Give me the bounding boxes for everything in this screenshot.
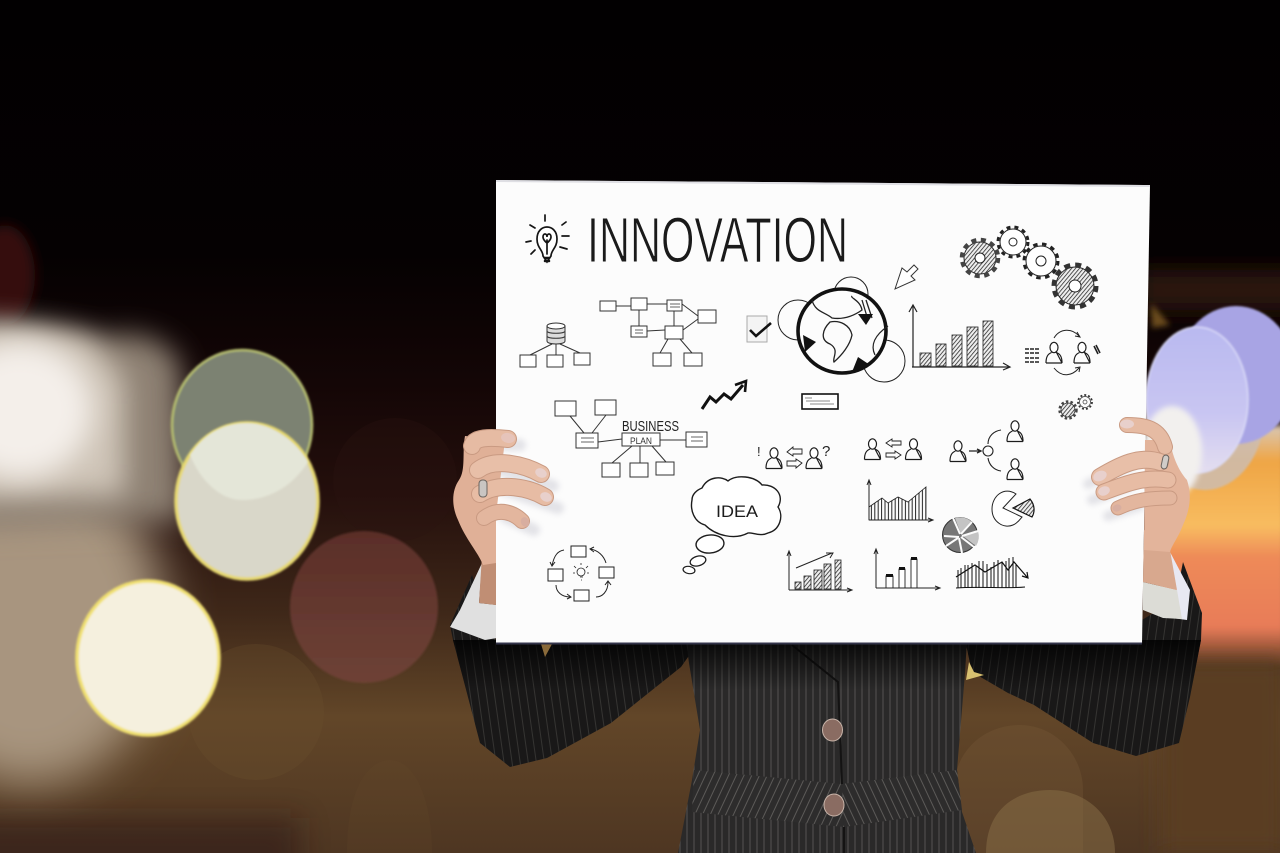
cycle diagram with bulb: [548, 546, 614, 601]
business plan diagram: [555, 400, 707, 477]
hand: left: [453, 432, 558, 605]
fingernails: [1120, 420, 1134, 428]
hand: right: [1088, 420, 1190, 590]
bokeh lights: [77, 306, 1280, 853]
icon: two people exchanging: [864, 439, 922, 460]
bar chart: three columns: [874, 549, 940, 590]
line chart: vertical bars with zigzag: [956, 557, 1028, 588]
icon: check box: [747, 316, 771, 342]
icon: people exchanging ideas: [1025, 330, 1100, 375]
label: exclamation mark: !: [757, 444, 761, 459]
label: idea: IDEA: [716, 502, 759, 521]
wrist: [1143, 530, 1177, 590]
pie chart: wedge removed: [992, 491, 1034, 526]
icon: database hierarchy: [520, 323, 590, 367]
soft finger shadows on board: [1088, 466, 1140, 516]
icon: globe: [778, 277, 905, 382]
bar chart: rising bars with trend: [787, 551, 852, 592]
icon: pointer arrow: [895, 265, 918, 289]
icon: zigzag growth arrow: [702, 381, 746, 409]
icon: light bulb: [526, 215, 569, 262]
panel: white board: [496, 180, 1150, 644]
bar chart: growth: [909, 305, 1010, 370]
icon: ring: [1161, 455, 1169, 469]
jacket torso: [678, 640, 976, 853]
photo illustration: person holding innovation board: [0, 180, 1280, 853]
icon: one person to two: [950, 421, 1023, 480]
icon: bank cheque: [802, 394, 838, 409]
fingernails: [500, 432, 516, 444]
icon: jacket button bottom: [824, 794, 844, 816]
icon: gears: [962, 227, 1096, 307]
label: business: BUSINESS: [622, 418, 679, 435]
flowchart: [600, 298, 716, 366]
palm: [453, 436, 505, 565]
shirt cuffs: [450, 552, 1190, 640]
title: INNOVATION: [587, 204, 848, 276]
left sleeve: [450, 575, 700, 767]
icon: ring: [479, 480, 487, 497]
fingers: [1100, 425, 1170, 508]
soft finger shadows on board: [500, 445, 558, 530]
icon: idea thought cloud: [682, 477, 781, 575]
area chart: [867, 480, 933, 522]
jacket waistband: [692, 770, 962, 827]
icon: jacket button top: [822, 719, 842, 741]
fingers: [472, 438, 545, 521]
background glimpses under the board: [541, 644, 984, 680]
label: plan: PLAN: [630, 436, 652, 446]
icon: people with question: [757, 443, 830, 468]
pie chart: segmented: [942, 517, 979, 553]
suit: person's torso and arms: [450, 562, 1202, 853]
right sleeve: [965, 562, 1202, 756]
wrist: [479, 540, 496, 605]
palm: [1144, 440, 1190, 552]
icon: small gears: [1060, 395, 1092, 418]
label: question mark: ?: [822, 443, 830, 460]
